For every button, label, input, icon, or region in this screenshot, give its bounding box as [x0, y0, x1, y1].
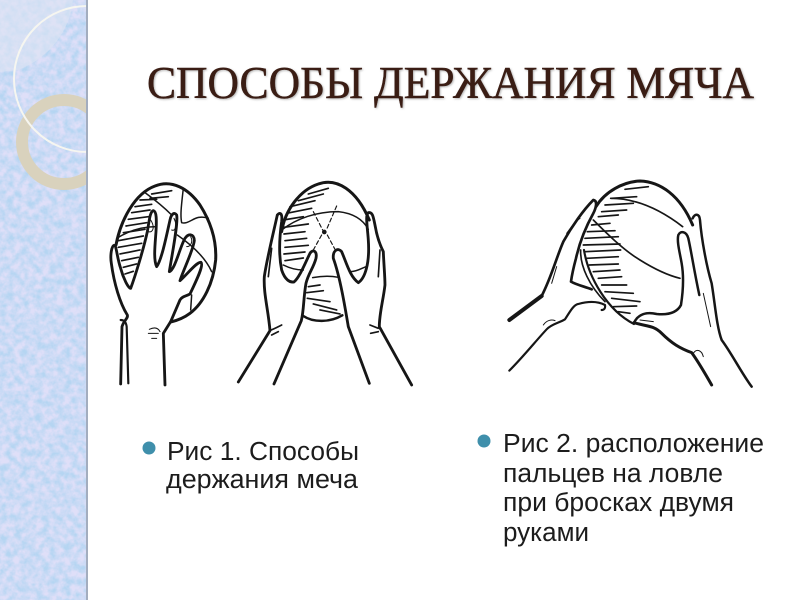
finger gap lines	[148, 218, 192, 338]
ball outline	[116, 184, 216, 322]
caption: figure 1	[166, 438, 359, 494]
top-left tinted leaf shape	[0, 0, 73, 72]
ball seams	[593, 198, 683, 278]
decorative side panel	[0, 0, 88, 600]
seam dashes and dot	[313, 206, 337, 250]
beige ring	[22, 100, 106, 184]
ball left arc	[584, 250, 634, 324]
ball lower arc	[303, 315, 342, 321]
caption: figure 1: Рис 1. Способы	[167, 438, 359, 466]
hand outline	[111, 211, 202, 385]
caption: figure 1: держания меча	[166, 466, 359, 494]
illustration: two hands holding ball from behind	[238, 182, 412, 385]
ball hatching	[283, 188, 340, 314]
left hand	[238, 213, 316, 384]
ball outline	[596, 181, 693, 225]
caption: figure 2	[503, 430, 764, 547]
bullet: figure 2 caption	[478, 434, 490, 448]
ball seams	[282, 212, 368, 278]
caption: figure 2: пальцев на ловле	[503, 460, 723, 488]
ball outline	[282, 182, 369, 232]
left hand	[509, 296, 542, 320]
right hand	[634, 323, 712, 385]
illustration: side view of hands on ball	[509, 181, 752, 387]
ball hatching	[118, 191, 172, 274]
ball seams	[117, 188, 212, 310]
illustration: one hand holding ball	[111, 184, 216, 385]
right hand	[333, 213, 412, 385]
caption: figure 2: руками	[503, 519, 589, 547]
bullet: figure 1 caption	[142, 442, 156, 454]
title: СПОСОБЫ ДЕРЖАНИЯ МЯЧА	[148, 59, 755, 109]
caption: figure 2: при бросках двумя	[503, 489, 734, 517]
title: СПОСОБЫ ДЕРЖАНИЯ МЯЧА	[147, 58, 754, 108]
white arc	[13, 5, 86, 153]
ball hatching	[583, 187, 648, 313]
caption: figure 2: Рис 2. расположение	[503, 430, 764, 458]
